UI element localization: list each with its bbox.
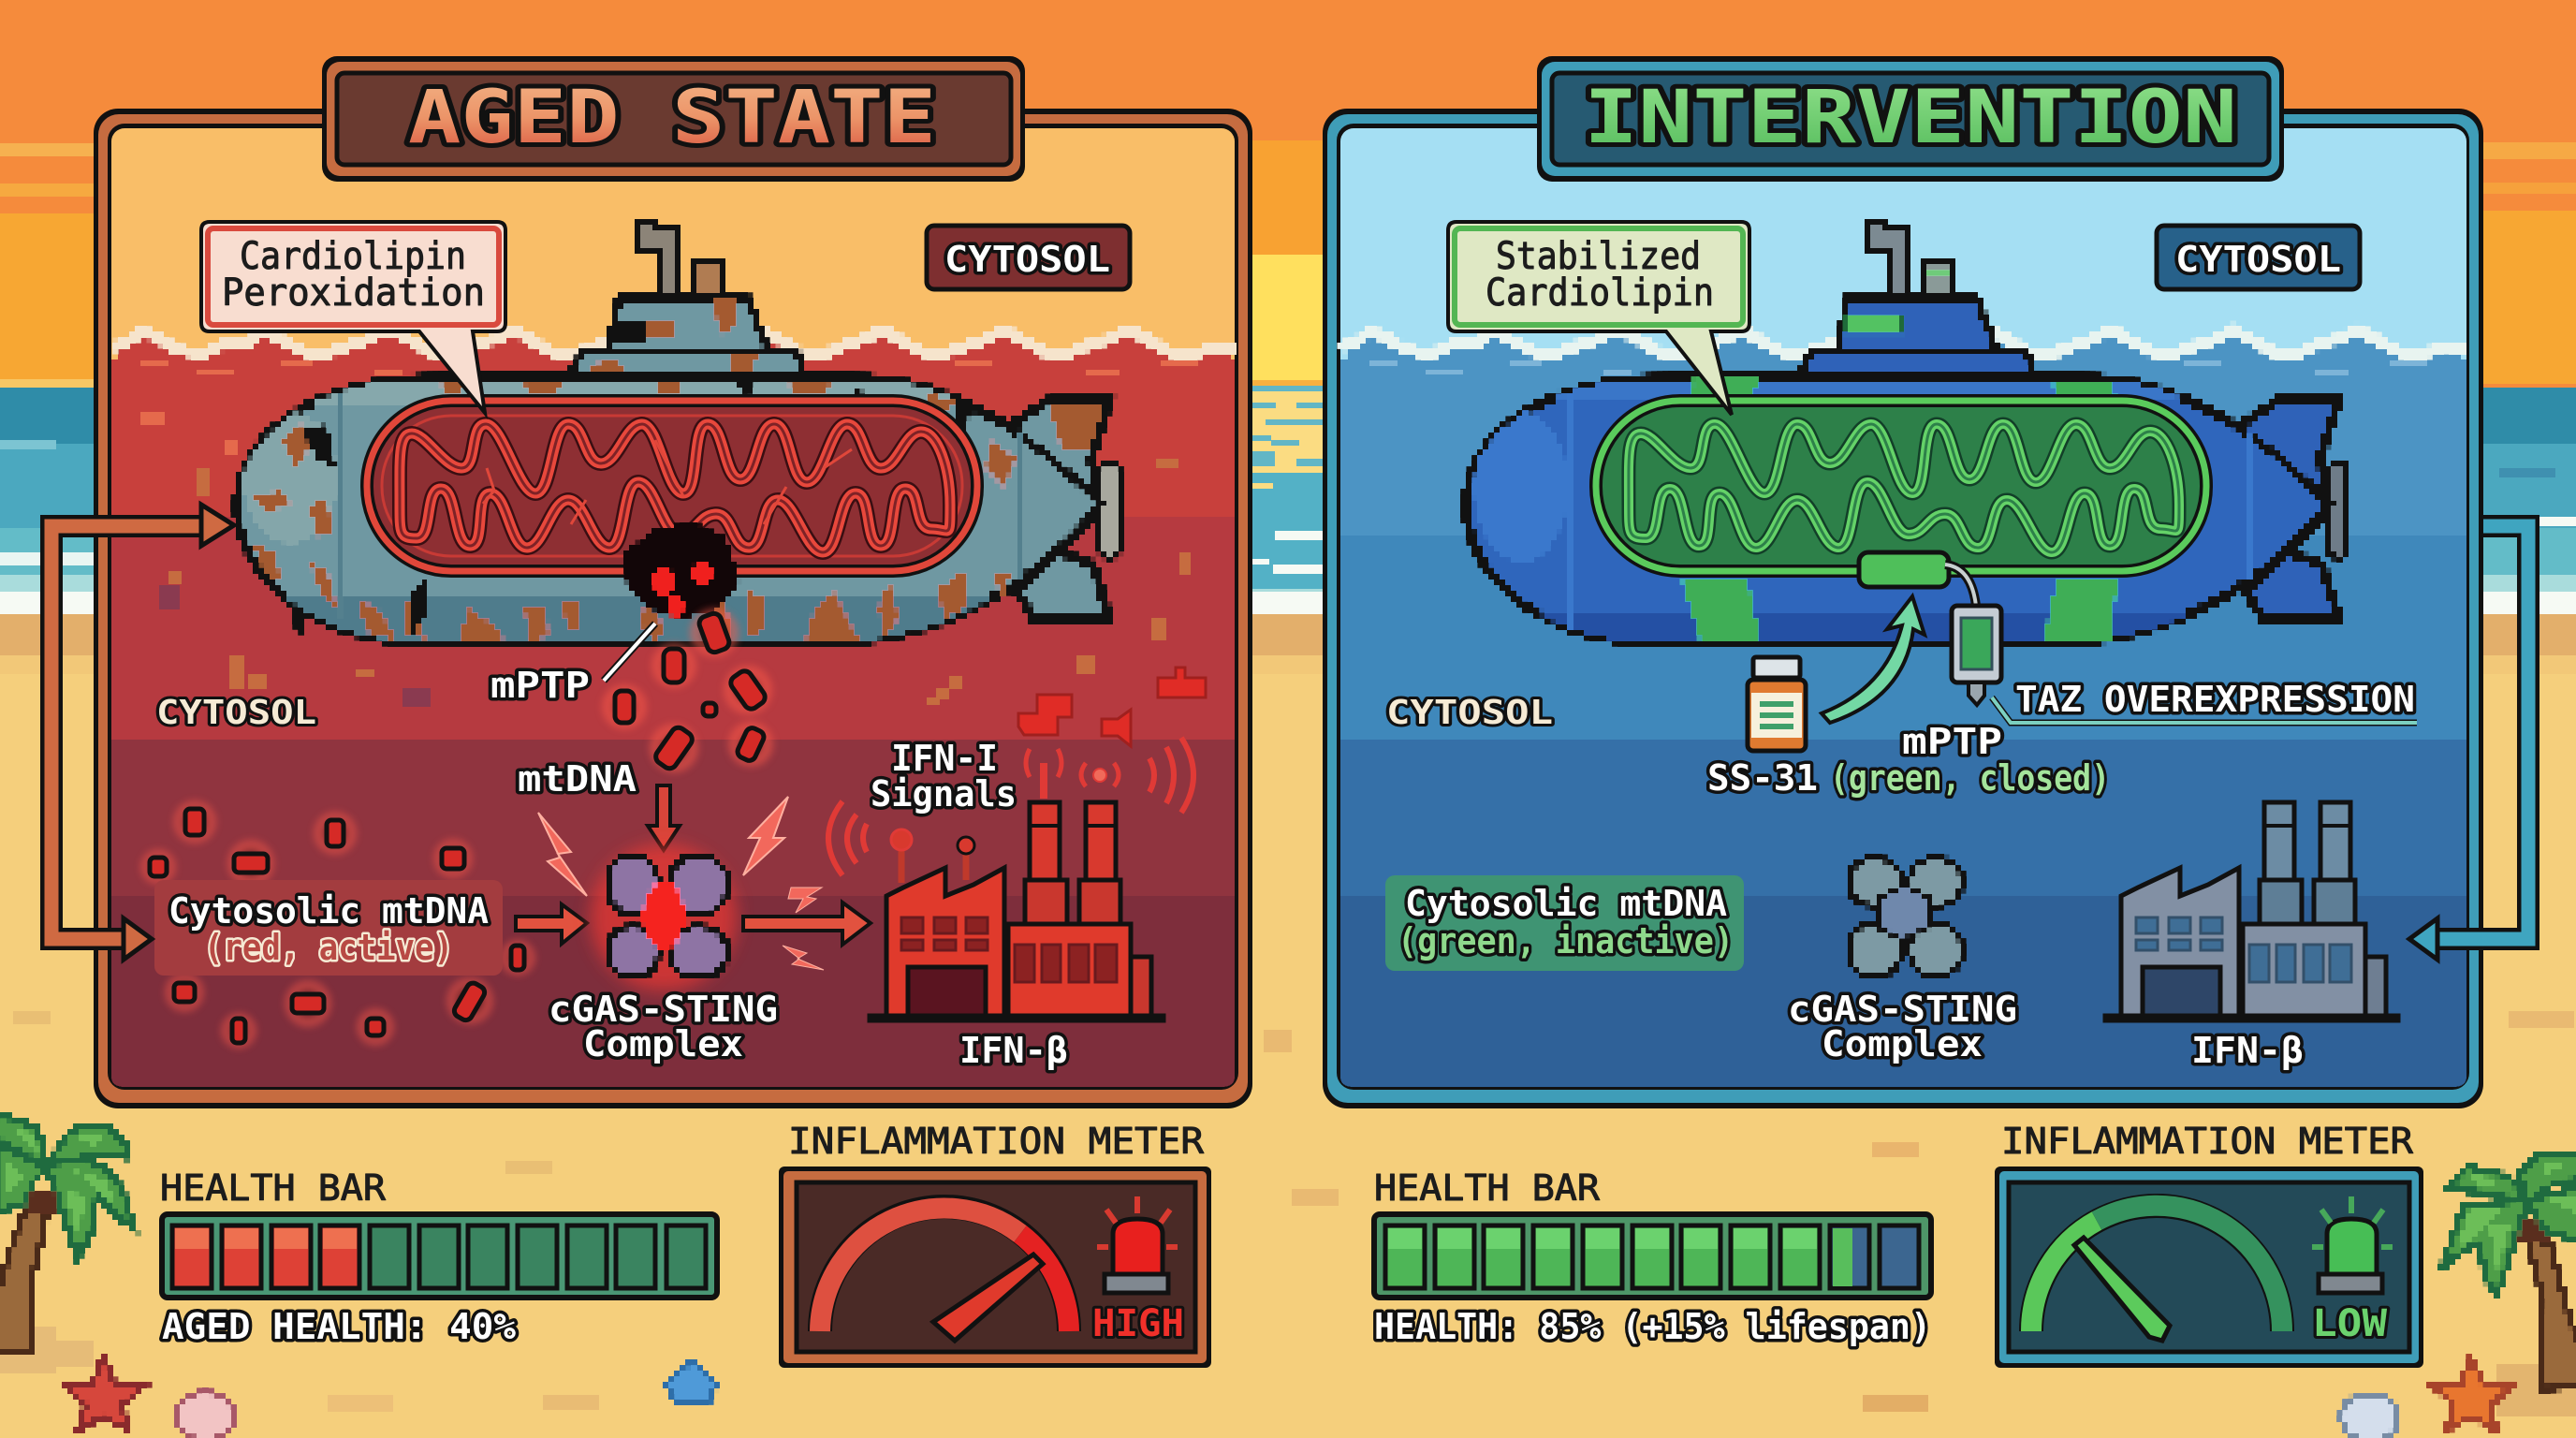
health bar: intervention, 85 percent: HEALTH BAR (1374, 1167, 1600, 1209)
cGAS-STING label: Complex (583, 1023, 743, 1064)
cGAS-STING label (1788, 989, 2017, 1064)
gauge dial (2031, 1206, 2282, 1331)
IFN-I signals label (871, 738, 1017, 814)
cytosol tag: CYTOSOL (2175, 239, 2341, 280)
submarine: repaired blue hull (1460, 220, 2349, 723)
callout: cardiolipin peroxidation: Cardiolipin (240, 235, 466, 278)
health bar: intervention, 85 percent (1374, 1167, 1931, 1347)
gauge needle (933, 1255, 1043, 1341)
mPTP closed green pore (1859, 552, 1976, 606)
gauge needle (2074, 1238, 2170, 1341)
SS-31 closed label: SS-31 (1707, 757, 1818, 799)
leaking mtDNA fragments (607, 611, 768, 771)
IFN-beta label: IFN-β (2191, 1030, 2304, 1071)
icon: SS-31 bottle (1748, 657, 1806, 751)
arrow: mtDNA into cGAS-STING (648, 785, 680, 850)
title plaque: aged state (322, 56, 1025, 182)
cytosolic mtDNA label, red active (154, 880, 503, 976)
icon: IFN-beta factory, active (870, 802, 1164, 1020)
mitochondrion (367, 401, 977, 571)
callout: cardiolipin peroxidation (201, 222, 505, 413)
inflammation meter: low (1995, 1121, 2423, 1368)
icon: blue shell (666, 1362, 716, 1404)
inflammation meter: low: INFLAMMATION METER (2001, 1121, 2413, 1162)
inflammation meter: high: INFLAMMATION METER (788, 1121, 1204, 1162)
blue cytosol water bands (1340, 330, 2466, 1087)
inflammation meter: high: HIGH (1092, 1302, 1184, 1345)
arrow: mtDNA to cGAS (516, 904, 587, 944)
callout: stabilized cardiolipin (1448, 222, 1749, 415)
icon: left palm tree (0, 1117, 133, 1351)
IFN-I signals label: IFN-I (891, 738, 998, 779)
cytosol tag (927, 226, 1130, 289)
icon: cGAS-STING complex, activated (591, 844, 737, 990)
alarm light (1097, 1196, 1178, 1293)
IFN-I signal waves (828, 738, 1193, 875)
panel: intervention (1323, 109, 2483, 1108)
callout: stabilized cardiolipin: Stabilized (1496, 235, 1701, 278)
signal icons (1018, 668, 1206, 746)
mPTP label: mPTP (1902, 721, 2002, 762)
health bar: intervention, 85 percent: HEALTH: 85% (+15% lifespan) (1374, 1306, 1931, 1347)
cytosolic mtDNA scatter (145, 805, 531, 1044)
lightning bolts (538, 797, 824, 970)
cGAS-STING label: cGAS-STING (549, 989, 778, 1030)
health bar: aged, 40 percent: HEALTH BAR (160, 1167, 386, 1209)
title plaque: intervention: INTERVENTION (1584, 76, 2237, 160)
title plaque: intervention (1537, 56, 2284, 182)
icon: cGAS-STING complex, inactive (1849, 858, 1962, 976)
cGAS-STING label: Complex (1822, 1023, 1983, 1064)
inflammation meter: low: LOW (2312, 1302, 2388, 1345)
arrow: feedback loop into aged submarine (51, 505, 234, 960)
callout: stabilized cardiolipin: Cardiolipin (1486, 271, 1714, 315)
cGAS-STING label: cGAS-STING (1788, 989, 2017, 1030)
cytosolic mtDNA label, green inactive: (green, inactive) (1398, 920, 1734, 961)
panel: aged state (94, 109, 1252, 1108)
IFN-I signals label: Signals (871, 773, 1017, 814)
icon: TAZ device (1952, 606, 2001, 705)
cytosolic mtDNA label, red active: Cytosolic mtDNA (168, 890, 489, 932)
icon: IFN-beta factory, inactive (2105, 802, 2398, 1020)
mPTP label (490, 624, 655, 706)
rusted hull, tower, fins and periscope (234, 220, 1123, 642)
cytosolic mtDNA label, green inactive: Cytosolic mtDNA (1405, 883, 1727, 924)
sun reflection in centre gap (1252, 386, 1323, 473)
cytosol tag (2157, 226, 2360, 289)
cytosol label: CYTOSOL (156, 694, 316, 732)
arrow: SS-31 to pore (1822, 596, 1925, 723)
cGAS-STING label (549, 989, 778, 1064)
IFN-beta label: IFN-β (959, 1030, 1068, 1071)
icon: red starfish (66, 1358, 144, 1430)
blue hull, tower, fins and periscope (1460, 220, 2349, 642)
red cytosol water bands (111, 330, 1236, 1087)
inflammation meter: high (779, 1121, 1211, 1368)
icon: pink shell (177, 1393, 233, 1438)
mtDNA label: mtDNA (518, 758, 637, 800)
cytosolic mtDNA label, red active: (red, active) (204, 927, 453, 968)
icon: orange starfish (2434, 1358, 2512, 1430)
arrow: feedback loop from intervention submarine (2409, 526, 2528, 960)
gauge dial (820, 1207, 1069, 1331)
cytosolic mtDNA label, green inactive (1385, 875, 1744, 971)
cytosol tag: CYTOSOL (944, 239, 1110, 280)
mPTP pore (625, 522, 739, 618)
health bar: aged, 40 percent (160, 1167, 717, 1347)
cytosol label: CYTOSOL (1386, 694, 1553, 732)
mitochondrion (1596, 401, 2206, 571)
alarm light (2312, 1196, 2393, 1293)
icon: right palm tree (2443, 1154, 2576, 1388)
SS-31 closed label: (green, closed) (1830, 757, 2110, 799)
arrow: cGAS to factory (743, 902, 871, 945)
SS-31 closed label (1707, 757, 2110, 799)
health bar: aged, 40 percent: AGED HEALTH: 40% (162, 1306, 516, 1347)
icon: white shell (2342, 1394, 2398, 1438)
mPTP label: mPTP (490, 665, 590, 706)
callout: cardiolipin peroxidation: Peroxidation (222, 271, 485, 315)
title plaque: aged state: AGED STATE (408, 76, 936, 160)
submarine: rusted mitochondrion hull (234, 220, 1123, 642)
TAZ overexpression label: TAZ OVEREXPRESSION (2015, 679, 2415, 720)
